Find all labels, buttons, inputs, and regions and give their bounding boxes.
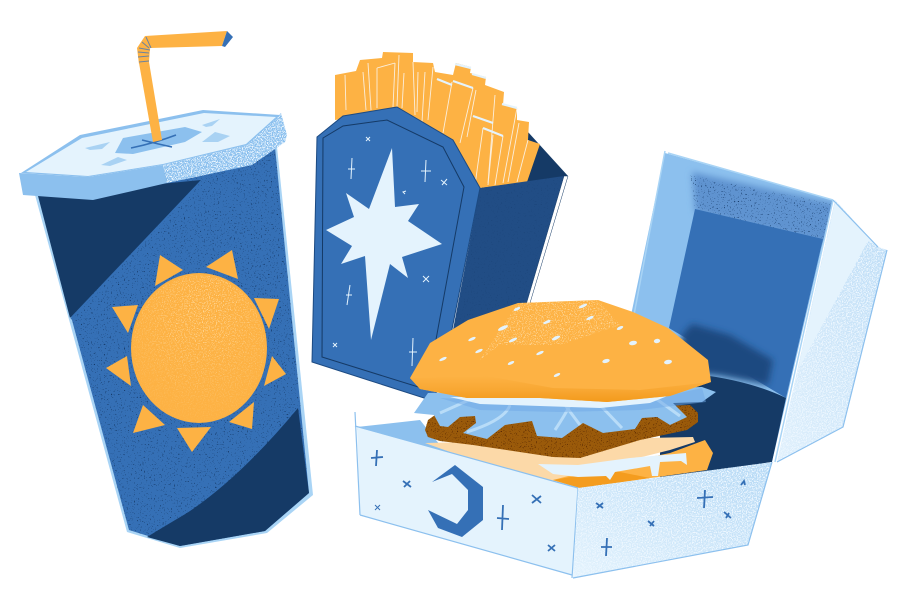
sesame seeds — [439, 303, 672, 378]
box right panel — [573, 462, 772, 578]
dark lower stripe — [147, 408, 309, 546]
bun white edge — [450, 395, 670, 408]
cup lid rim — [19, 165, 167, 200]
fries — [335, 52, 540, 188]
white sauce — [538, 453, 687, 480]
fries carton — [312, 52, 568, 399]
soda cup — [19, 31, 313, 548]
sun disc — [131, 273, 267, 423]
slaw — [425, 437, 695, 490]
star emblem — [326, 148, 442, 340]
dark upper stripe — [38, 180, 201, 318]
sun rays — [106, 250, 286, 452]
carton sparkles — [333, 137, 447, 366]
box lid interior — [630, 151, 838, 480]
lettuce — [414, 387, 716, 439]
crescent moon emblem — [428, 465, 483, 537]
cup body — [35, 147, 313, 548]
cup lid top — [21, 110, 280, 177]
lid emboss marks — [85, 119, 230, 166]
straw — [137, 31, 233, 142]
burger box base — [355, 412, 772, 578]
burger box — [357, 151, 887, 480]
carton side — [452, 176, 564, 335]
box floor left — [357, 420, 500, 470]
patty — [425, 405, 698, 458]
carton back inside — [480, 132, 568, 190]
carton front — [312, 107, 480, 399]
box sparkles — [371, 450, 745, 556]
burger — [410, 300, 716, 490]
carton inner outline — [322, 120, 464, 390]
box hinge panel — [777, 200, 887, 462]
box front panel — [357, 427, 578, 575]
bottom bun — [553, 440, 713, 488]
top bun — [410, 300, 711, 402]
